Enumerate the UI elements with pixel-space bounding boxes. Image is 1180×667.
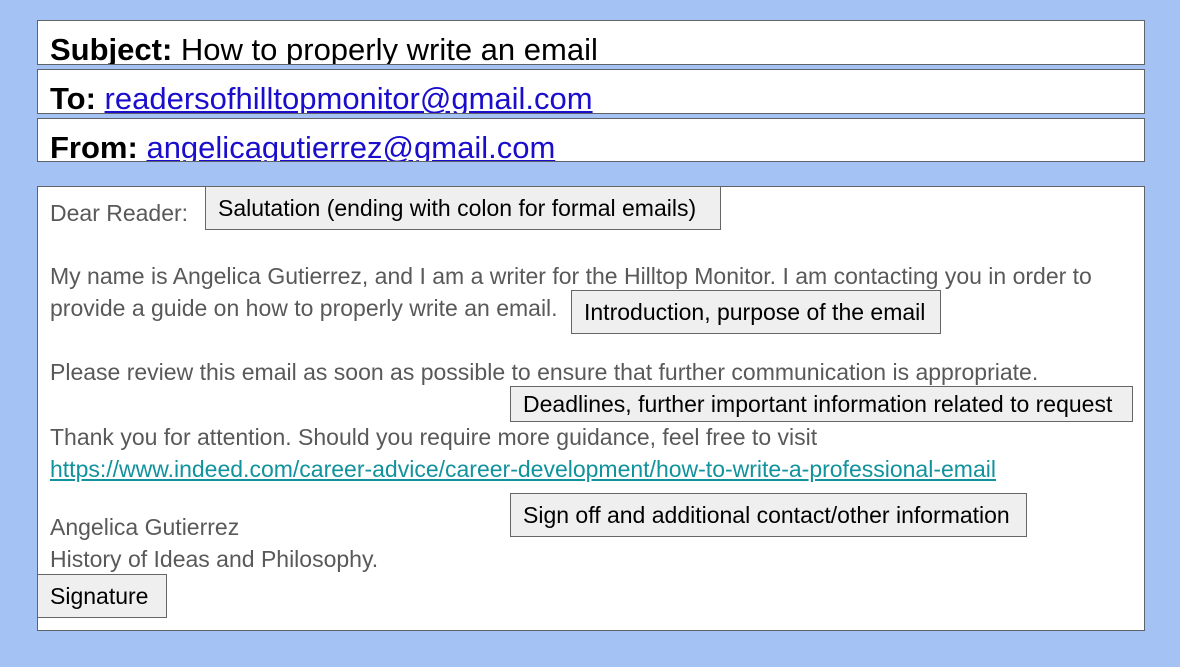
text: greeting: Dear Reader: — [50, 200, 188, 226]
text: request: Please review this email as soon as possible to ensure that further communication is appropriate. — [50, 359, 1038, 385]
text: signature — [50, 514, 378, 572]
label: deadlines — [510, 386, 1133, 422]
label: signature: Signature — [50, 582, 148, 608]
header: from — [37, 118, 1145, 162]
panel: email body — [37, 186, 1145, 631]
label: salutation — [205, 186, 721, 230]
text: signature: Angelica Gutierrez — [50, 514, 239, 540]
text: signature: History of Ideas and Philosophy. — [50, 546, 378, 572]
text: introduction: My name is Angelica Gutierrez, and I am a writer for the Hilltop Monitor. I am contacting you in order to — [50, 263, 1092, 289]
label: sign off: Sign off and additional contact/other information — [523, 502, 1010, 528]
label: salutation: Salutation (ending with colon for formal emails) — [218, 194, 696, 220]
label: introduction: Introduction, purpose of the email — [584, 298, 925, 324]
text: closing with link: https://www.indeed.com/career-advice/career-development/how-to-write-a-professional-email — [50, 456, 996, 482]
text: closing with link — [50, 424, 996, 482]
label: introduction — [571, 290, 941, 334]
text: introduction — [50, 263, 1092, 321]
label: signature — [37, 574, 167, 618]
text: introduction: provide a guide on how to properly write an email. — [50, 295, 558, 321]
label: deadlines: Deadlines, further important information related to request — [523, 390, 1112, 416]
header: to — [37, 69, 1145, 114]
text: closing with link: Thank you for attention. Should you require more guidance, feel free to visit — [50, 424, 817, 450]
header: subject — [37, 20, 1145, 65]
label: sign off — [510, 493, 1027, 537]
